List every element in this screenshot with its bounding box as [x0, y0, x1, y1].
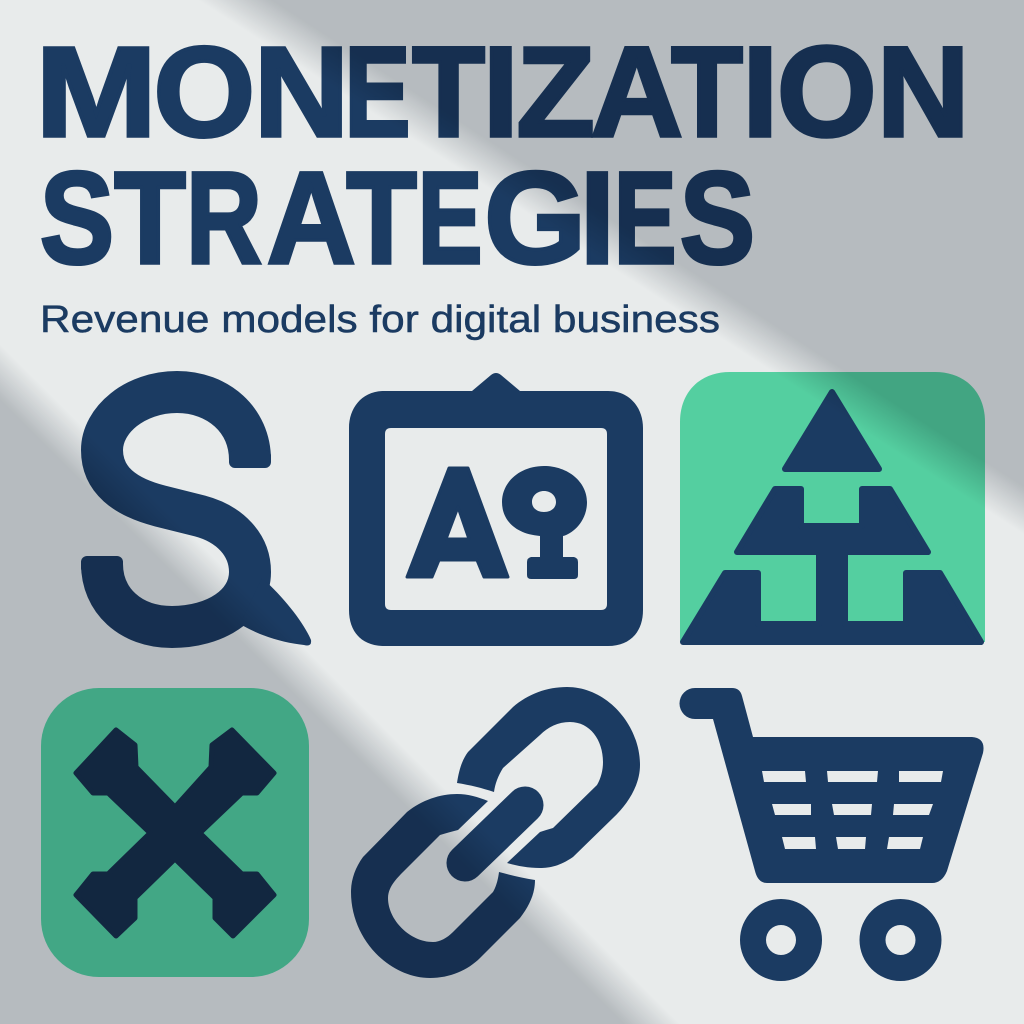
icon: chain link affiliate — [351, 687, 640, 978]
title: R — [186, 144, 262, 291]
icon: crossed tools panel — [41, 688, 309, 977]
icon: advertising frame — [349, 373, 643, 646]
title: S — [680, 144, 755, 291]
title — [35, 21, 969, 291]
title: M — [35, 21, 157, 164]
title: IZA — [483, 21, 683, 164]
title: A — [267, 144, 356, 291]
icon: shopping cart — [679, 688, 984, 981]
icon: dollar S subscription — [81, 392, 311, 645]
title: S — [40, 144, 114, 291]
title: E — [614, 144, 676, 291]
subtitle: Revenue models for digital business — [40, 299, 720, 341]
title: E — [418, 144, 483, 291]
title: T — [671, 21, 743, 164]
title: T — [412, 21, 485, 164]
icon: pyramid tiers panel — [680, 372, 985, 642]
title: T — [114, 144, 186, 291]
title: E — [345, 21, 411, 164]
left wheel — [740, 899, 822, 981]
title: ION — [742, 21, 969, 164]
title: N — [254, 21, 349, 164]
title: T — [346, 144, 417, 291]
title: O — [154, 21, 255, 164]
title: G — [484, 144, 586, 291]
right wheel — [859, 899, 941, 981]
title: I — [580, 144, 615, 291]
